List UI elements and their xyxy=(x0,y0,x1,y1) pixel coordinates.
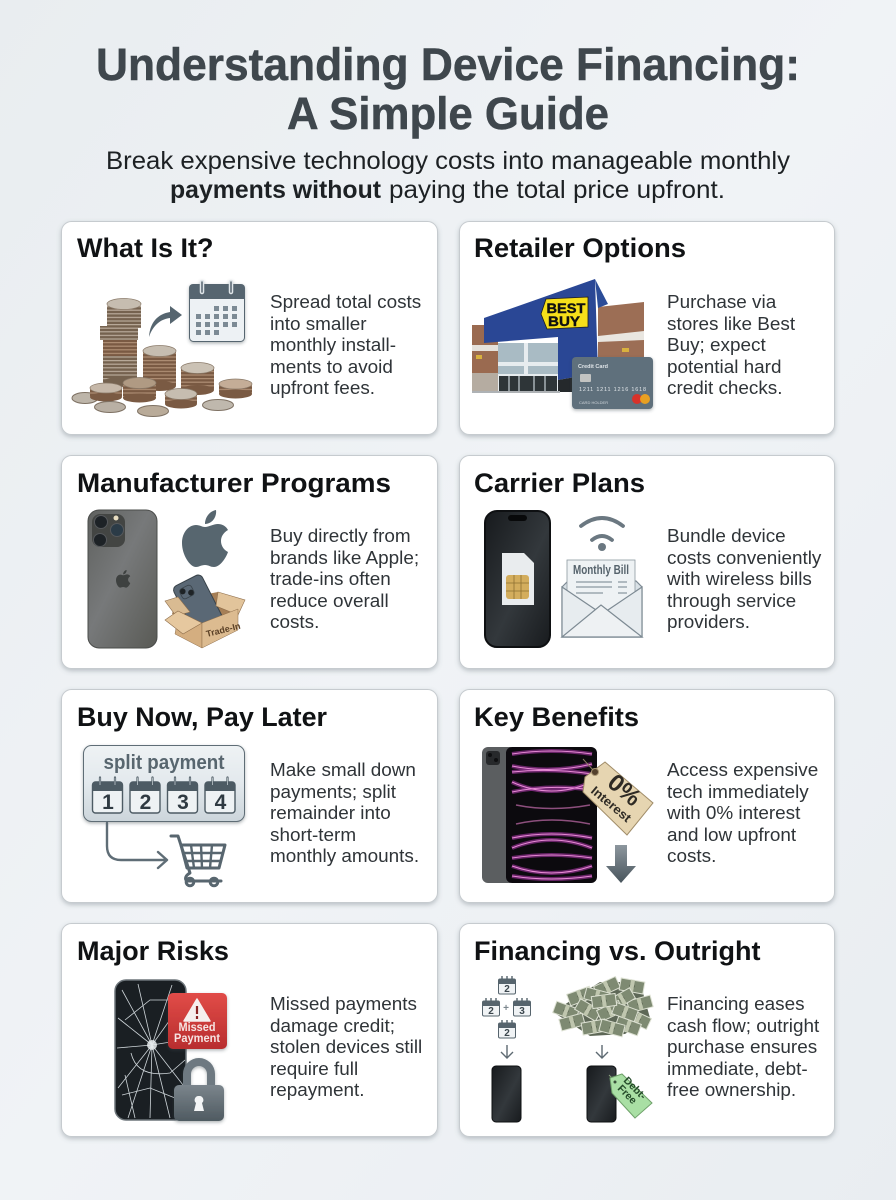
text: buy now pay later: payments; split xyxy=(270,782,397,803)
icon: coin stacks xyxy=(72,298,252,416)
text: financing vs outright: Financing eases xyxy=(667,994,805,1015)
icon: arrow down left xyxy=(501,1045,513,1058)
text: major risks: repayment. xyxy=(270,1080,364,1101)
text: manufacturer programs: costs. xyxy=(270,612,319,633)
icon: split payment calendars: 4 xyxy=(215,791,227,814)
text: manufacturer programs: Buy directly from xyxy=(270,526,411,547)
icon: debt-free tag: Debt- xyxy=(621,1075,649,1102)
logo: best buy: BEST xyxy=(546,301,586,316)
panel: key benefits xyxy=(460,690,834,902)
text: key benefits xyxy=(666,760,818,867)
text: carrier plans: with wireless bills xyxy=(666,569,812,590)
icon: cracked phone xyxy=(115,980,186,1120)
heading: retailer options: Retailer Options xyxy=(474,233,686,263)
icon: missed payment badge: Payment xyxy=(174,1033,220,1045)
icon: calendar installments: 2 xyxy=(504,984,510,995)
icon: tablet xyxy=(482,747,597,883)
text: buy now pay later: short-term xyxy=(270,825,356,846)
icon: cash pile xyxy=(553,976,653,1037)
text: what is it: upfront fees. xyxy=(270,378,375,399)
text: major risks: damage credit; xyxy=(270,1016,395,1037)
icon: credit card: 1211 1211 1216 1618 xyxy=(579,387,646,393)
icon: split payment calendars: split payment xyxy=(104,752,225,774)
heading: carrier plans: Carrier Plans xyxy=(474,468,645,498)
icon: split payment calendars xyxy=(84,746,244,822)
panel: manufacturer programs xyxy=(62,456,438,668)
text: carrier plans: Bundle device xyxy=(667,526,786,547)
text: key benefits: with 0% interest xyxy=(666,803,801,824)
text: key benefits: and low upfront xyxy=(667,825,797,846)
icon: monthly bill envelope xyxy=(562,560,642,637)
icon: calendar installments: 2 xyxy=(488,1006,494,1017)
icon: split payment calendars: 1 xyxy=(102,791,114,814)
icon: split payment calendars: 3 xyxy=(177,791,189,814)
icon: calendar installments: 2 xyxy=(504,1028,510,1039)
heading: what is it: What Is It? xyxy=(77,233,214,263)
panel: retailer options xyxy=(460,222,834,434)
icon: credit card xyxy=(572,357,653,409)
icon: padlock xyxy=(174,1058,224,1121)
text: manufacturer programs xyxy=(270,526,419,633)
text: carrier plans: through service xyxy=(667,591,796,612)
heading: major risks: Major Risks xyxy=(77,936,229,966)
text: retailer options: Purchase via xyxy=(667,292,777,313)
text: retailer options xyxy=(667,292,796,399)
icon: trade-in box: Trade-In xyxy=(205,621,241,639)
icon: debt-free tag xyxy=(609,1074,652,1118)
panel: financing vs outright xyxy=(460,924,834,1136)
icon: credit card: Credit Card xyxy=(578,364,608,370)
icon: calendar installments: + xyxy=(503,1003,509,1014)
icon: zero percent tag: Interest xyxy=(588,784,635,826)
icon: zero percent tag: 0% xyxy=(602,769,646,812)
text: what is it: Spread total costs xyxy=(270,292,421,313)
text: key benefits: Access expensive xyxy=(667,760,818,781)
text: manufacturer programs: trade-ins often xyxy=(270,569,391,590)
text: buy now pay later xyxy=(270,760,419,867)
text: carrier plans: costs conveniently xyxy=(667,548,822,569)
text: key benefits: costs. xyxy=(667,846,716,867)
subtitle: paying the total price upfront. xyxy=(389,176,725,204)
icon: credit card: CARD HOLDER xyxy=(579,400,608,405)
panel: major risks xyxy=(62,924,438,1136)
heading: manufacturer programs: Manufacturer Programs xyxy=(77,468,391,498)
subtitle: Break expensive technology costs into manageable monthly xyxy=(106,147,790,175)
title xyxy=(96,39,800,139)
icon: phone left xyxy=(492,1066,521,1122)
panel: what is it xyxy=(62,222,438,434)
panel: buy now pay later xyxy=(62,690,438,902)
icon: trade-in box xyxy=(165,573,245,648)
icon: phone right xyxy=(587,1066,616,1122)
text: buy now pay later: monthly amounts. xyxy=(270,846,419,867)
icon: phone with sim xyxy=(485,511,550,647)
text: retailer options: credit checks. xyxy=(667,378,782,399)
icon: wifi xyxy=(581,518,623,551)
icon: monthly bill envelope: Monthly Bill xyxy=(573,563,629,577)
text: carrier plans xyxy=(666,526,822,633)
text: carrier plans: providers. xyxy=(667,612,750,633)
panel: carrier plans xyxy=(460,456,834,668)
text: what is it: into smaller xyxy=(270,314,367,335)
icon: curved arrow xyxy=(149,306,182,337)
text: buy now pay later: Make small down xyxy=(270,760,416,781)
logo: best buy: BUY xyxy=(548,313,581,329)
icon: missed payment badge xyxy=(168,993,227,1049)
text: major risks: stolen devices still xyxy=(270,1037,422,1058)
title: Understanding Device Financing: xyxy=(96,39,800,90)
icon: apple logo xyxy=(182,510,228,567)
text: financing vs outright: free ownership. xyxy=(667,1080,796,1101)
icon: calendar installments xyxy=(482,976,530,1039)
subtitle: payments without xyxy=(170,176,382,204)
text: retailer options: stores like Best xyxy=(667,314,796,335)
text: key benefits: tech immediately xyxy=(667,782,809,803)
text: major risks: require full xyxy=(270,1059,358,1080)
icon: arrow down right xyxy=(596,1045,608,1058)
icon: split payment calendars: 2 xyxy=(140,791,151,814)
icon: store xyxy=(472,279,653,409)
heading: key benefits: Key Benefits xyxy=(474,702,639,732)
text: what is it: ments to avoid xyxy=(270,357,393,378)
text: financing vs outright: purchase ensures xyxy=(667,1037,817,1058)
text: manufacturer programs: brands like Apple; xyxy=(270,548,419,569)
icon: down arrow xyxy=(606,845,636,883)
icon: zero percent tag xyxy=(583,759,653,835)
text: retailer options: potential hard xyxy=(667,357,781,378)
icon: calendar xyxy=(189,282,245,342)
text: financing vs outright: immediate, debt- xyxy=(667,1059,808,1080)
icon: iphone back xyxy=(88,510,157,648)
text: financing vs outright xyxy=(667,994,820,1101)
icon: missed payment badge: Missed xyxy=(178,1022,216,1034)
icon: debt-free tag: Free xyxy=(615,1083,639,1107)
text: retailer options: Buy; expect xyxy=(667,335,766,356)
subtitle xyxy=(106,147,790,204)
text: major risks xyxy=(270,994,422,1101)
heading: financing vs outright: Financing vs. Outright xyxy=(474,936,761,966)
logo: best buy xyxy=(541,297,588,329)
text: major risks: Missed payments xyxy=(270,994,417,1015)
text: financing vs outright: cash flow; outright xyxy=(667,1016,820,1037)
icon: shopping cart xyxy=(171,836,225,886)
text: manufacturer programs: reduce overall xyxy=(270,591,389,612)
text: buy now pay later: remainder into xyxy=(270,803,391,824)
text: what is it xyxy=(270,292,421,399)
icon: calendar installments: 3 xyxy=(519,1006,525,1017)
icon: arrow to cart xyxy=(107,823,167,868)
text: what is it: monthly install- xyxy=(270,335,396,356)
title: A Simple Guide xyxy=(287,88,609,139)
heading: buy now pay later: Buy Now, Pay Later xyxy=(77,702,327,732)
